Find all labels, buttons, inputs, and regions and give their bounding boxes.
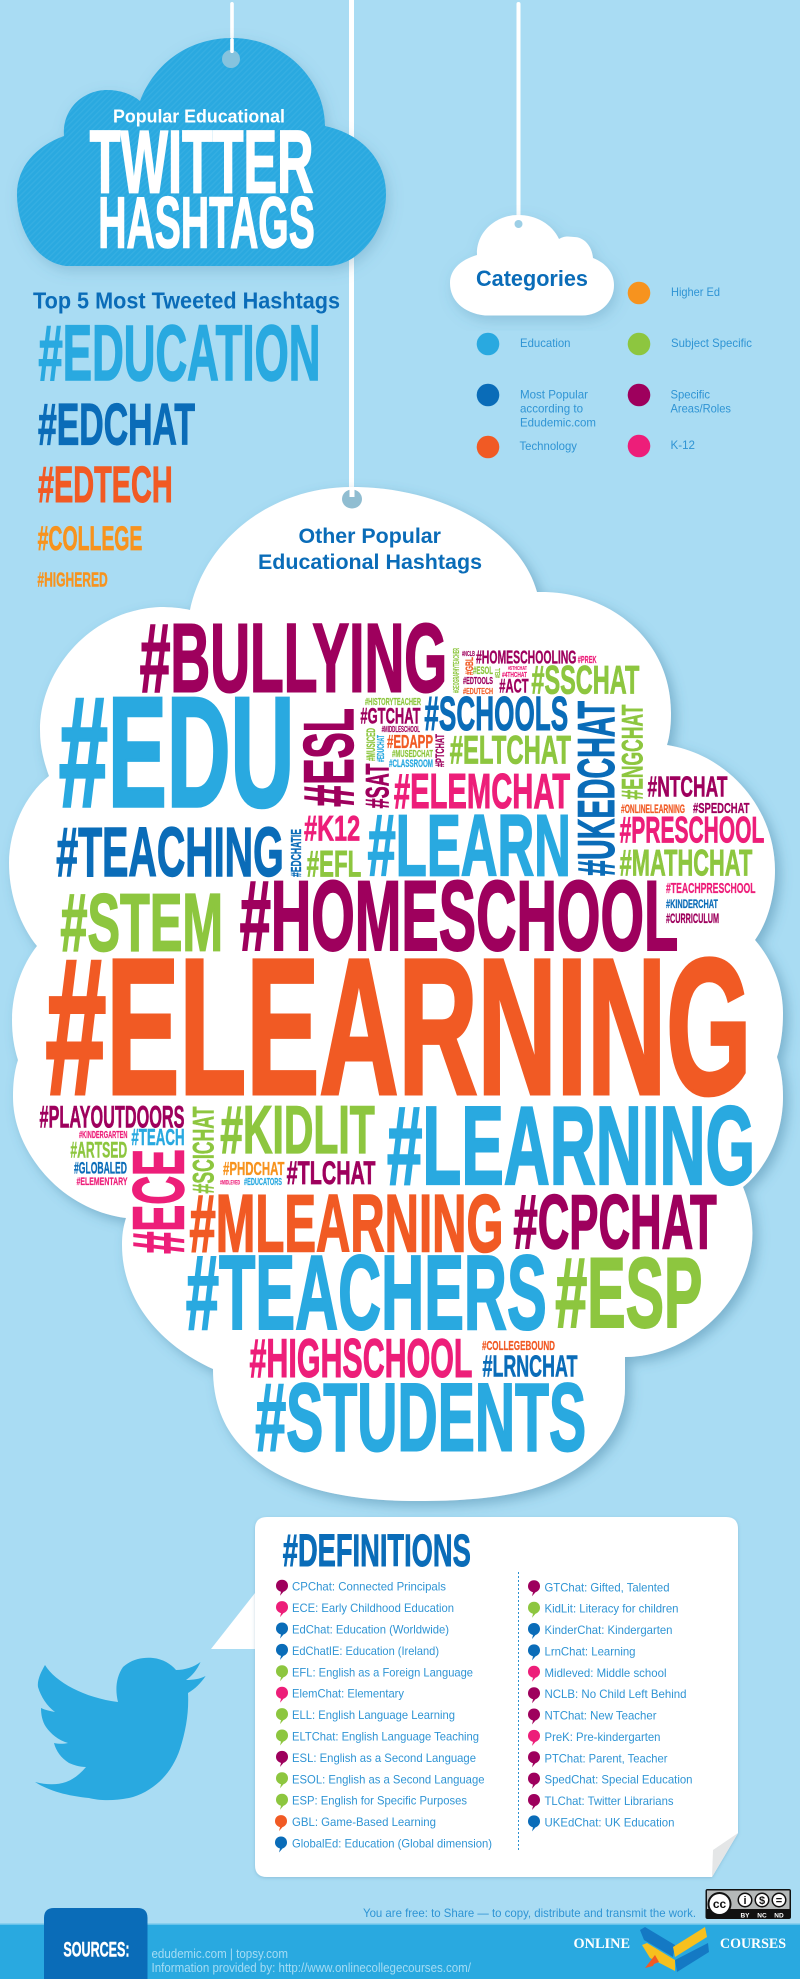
top 5 list: #COLLEGE bbox=[38, 520, 142, 558]
top 5 list: #EDTECH bbox=[38, 456, 173, 513]
right definitions: PreK: Pre-kindergarten bbox=[544, 1730, 660, 1744]
word cloud: #GBL bbox=[464, 657, 476, 675]
top 5 list bbox=[37, 309, 320, 592]
word cloud: #GLOBALED bbox=[74, 1158, 127, 1178]
word cloud: #MIDDLESCHOOL bbox=[382, 724, 420, 734]
word cloud: #ECE bbox=[119, 1149, 199, 1254]
right definitions: NTChat: New Teacher bbox=[544, 1708, 657, 1722]
word cloud: #HOMESCHOOLING bbox=[476, 648, 576, 668]
right definitions: GTChat: Gifted, Talented bbox=[544, 1580, 670, 1594]
top 5 list: #HIGHERED bbox=[37, 570, 108, 592]
left definitions: ESOL: English as a Second Language bbox=[292, 1772, 485, 1786]
left definitions: ELTChat: English Language Teaching bbox=[292, 1730, 479, 1744]
creative commons badge bbox=[706, 1889, 791, 1920]
legend: Subject Specific bbox=[671, 336, 752, 350]
icon: twitter bird bbox=[35, 1658, 206, 1800]
right definitions: KinderChat: Kindergarten bbox=[544, 1623, 672, 1637]
word cloud: #KIDLIT bbox=[220, 1093, 375, 1168]
word cloud: #MUSEDCHAT bbox=[392, 749, 433, 760]
word cloud: #EDUCATORS bbox=[244, 1177, 282, 1188]
sources box bbox=[44, 1908, 148, 1979]
word cloud: #ARTSED bbox=[70, 1138, 127, 1163]
left definitions: ELL: English Language Learning bbox=[292, 1708, 455, 1722]
word cloud: #ENGCHAT bbox=[616, 704, 650, 800]
right definitions: NCLB: No Child Left Behind bbox=[544, 1687, 686, 1701]
word cloud: #PLAYOUTDOORS bbox=[40, 1100, 185, 1134]
right definitions: UKEdChat: UK Education bbox=[544, 1815, 674, 1829]
column divider bbox=[518, 1572, 520, 1852]
top 5 list: #EDCHAT bbox=[38, 393, 195, 458]
word cloud: #EDCHATIE bbox=[288, 829, 305, 877]
page curl bbox=[712, 1833, 738, 1877]
heading: other popular hashtags: Educational Hashtags bbox=[258, 551, 482, 574]
left definitions: ECE: Early Childhood Education bbox=[292, 1601, 454, 1615]
word cloud: #LEARN bbox=[368, 796, 571, 894]
left definitions: GlobalEd: Education (Global dimension) bbox=[292, 1836, 492, 1850]
legend: Education bbox=[520, 336, 570, 350]
word cloud: #ELL bbox=[495, 668, 502, 678]
legend: Specific bbox=[670, 388, 710, 402]
legend: Edudemic.com bbox=[520, 416, 596, 430]
word cloud: #MLEARNING bbox=[189, 1180, 503, 1270]
legend bbox=[477, 282, 752, 458]
hanging string: main cloud bbox=[349, 0, 354, 497]
top 5 list: #EDUCATION bbox=[38, 309, 320, 397]
title cloud bbox=[17, 38, 386, 266]
sources text: edudemic.com | topsy.com bbox=[152, 1946, 288, 1961]
main cloud hanging hole bbox=[342, 487, 362, 508]
word cloud: #NTCHAT bbox=[648, 770, 728, 802]
word cloud: #CURRICULUM bbox=[666, 911, 719, 926]
legend: K-12 bbox=[670, 438, 695, 452]
word cloud: #SPEDCHAT bbox=[693, 800, 750, 817]
word cloud: #UKEDCHAT bbox=[568, 701, 626, 876]
word cloud: #ESOL bbox=[473, 665, 493, 677]
title cloud: HASHTAGS bbox=[98, 184, 315, 264]
speech bubble tail bbox=[211, 1593, 255, 1649]
word cloud: #BULLYING bbox=[140, 603, 447, 712]
word cloud: #TLCHAT bbox=[287, 1155, 376, 1191]
word cloud: #EDUTECH bbox=[463, 686, 493, 696]
right definitions: LrnChat: Learning bbox=[544, 1644, 636, 1658]
creative commons badge: NC bbox=[757, 1912, 767, 1920]
word cloud: #PTCHAT bbox=[433, 734, 447, 767]
creative commons badge: cc bbox=[713, 1897, 726, 1911]
word cloud: #PREK bbox=[578, 655, 596, 666]
word cloud: #SSCHAT bbox=[531, 658, 639, 702]
word cloud: #ELEMENTARY bbox=[76, 1176, 128, 1188]
word cloud: #COLLEGEBOUND bbox=[482, 1338, 555, 1353]
word cloud: #MIDLEVED bbox=[220, 1180, 240, 1186]
word cloud: #PHDCHAT bbox=[223, 1159, 285, 1179]
legend: Most Popular bbox=[520, 388, 588, 402]
legend: Areas/Roles bbox=[670, 402, 731, 416]
word cloud: #ESL bbox=[289, 708, 368, 807]
creative commons badge: i bbox=[743, 1895, 747, 1907]
word cloud: #EFL bbox=[307, 843, 361, 884]
word cloud: #EDTOOLS bbox=[463, 676, 493, 687]
sources text: Information provided by: http://www.onlinecollegecourses.com/ bbox=[152, 1960, 471, 1975]
right definitions: TLChat: Twitter Librarians bbox=[544, 1794, 674, 1808]
word cloud: #TEACHING bbox=[56, 813, 284, 891]
online courses logo: ONLINE bbox=[574, 1936, 630, 1952]
creative commons badge: BY bbox=[740, 1912, 750, 1920]
right definitions: KidLit: Literacy for children bbox=[544, 1602, 678, 1616]
word cloud: #NCLB bbox=[462, 651, 475, 658]
word cloud: #STEM bbox=[60, 878, 223, 968]
word cloud: #HIGHSCHOOL bbox=[250, 1328, 472, 1389]
legend: Higher Ed bbox=[671, 285, 720, 299]
footer band bbox=[0, 1924, 800, 1979]
word cloud: #EDUCHAT bbox=[376, 735, 387, 762]
left definitions: CPChat: Connected Principals bbox=[292, 1580, 446, 1594]
left definitions: GBL: Game-Based Learning bbox=[292, 1815, 436, 1829]
left definitions bbox=[275, 1580, 492, 1852]
left definitions: ESL: English as a Second Language bbox=[292, 1751, 476, 1765]
left definitions: EdChat: Education (Worldwide) bbox=[292, 1622, 449, 1636]
left definitions: ElemChat: Elementary bbox=[292, 1687, 404, 1701]
definitions panel bbox=[211, 1517, 738, 1877]
word cloud: #ELEMCHAT bbox=[394, 764, 570, 819]
online courses logo: COURSES bbox=[720, 1936, 786, 1952]
heading: other popular hashtags bbox=[258, 525, 482, 574]
legend: according to bbox=[520, 402, 583, 416]
hanging string: title cloud bbox=[230, 2, 234, 54]
panel sheet bbox=[255, 1517, 738, 1877]
word cloud: #HISTORYTEACHER bbox=[365, 697, 421, 708]
right definitions: Midleved: Middle school bbox=[544, 1666, 666, 1680]
heading: other popular hashtags: Other Popular bbox=[298, 525, 441, 548]
word cloud: #ACT bbox=[499, 676, 529, 698]
categories cloud bbox=[450, 215, 614, 316]
title cloud: TWITTER bbox=[90, 112, 314, 211]
word cloud: #MUSICED bbox=[364, 728, 378, 761]
word cloud: #LRNCHAT bbox=[482, 1350, 578, 1384]
heading: top 5: Top 5 Most Tweeted Hashtags bbox=[33, 288, 340, 314]
word cloud: #EDU bbox=[59, 665, 294, 840]
left definitions: ESP: English for Specific Purposes bbox=[292, 1794, 467, 1808]
right definitions bbox=[528, 1580, 692, 1831]
main cloud bbox=[9, 487, 783, 1501]
word cloud: #4THCHAT bbox=[502, 672, 527, 679]
creative commons badge: $ bbox=[759, 1895, 765, 1907]
sources text bbox=[152, 1946, 471, 1975]
hanging string: categories cloud bbox=[516, 2, 520, 222]
legend: Technology bbox=[520, 439, 577, 453]
categories cloud: Categories bbox=[476, 266, 588, 291]
sources box: SOURCES: bbox=[63, 1937, 130, 1962]
online courses logo bbox=[574, 1927, 786, 1972]
word cloud bbox=[40, 603, 764, 1471]
word cloud: #SCICHAT bbox=[188, 1106, 220, 1194]
word cloud: #ONLINELEARNING bbox=[621, 802, 685, 816]
left definitions: EFL: English as a Foreign Language bbox=[292, 1665, 473, 1679]
word cloud: #KINDERCHAT bbox=[666, 897, 718, 911]
heading: definitions: #DEFINITIONS bbox=[283, 1525, 471, 1576]
right definitions: PTChat: Parent, Teacher bbox=[544, 1751, 668, 1765]
word cloud: #SAT bbox=[359, 764, 395, 808]
word cloud: #CLASSROOM bbox=[389, 758, 433, 770]
title cloud: Popular Educational bbox=[113, 106, 285, 126]
word cloud: #5THCHAT bbox=[508, 666, 527, 672]
word cloud: #K12 bbox=[304, 808, 360, 848]
word cloud: #GTCHAT bbox=[360, 704, 421, 729]
word cloud: #GEOGRAPHYTEACHER bbox=[451, 648, 461, 693]
word cloud: #EDAPP bbox=[387, 732, 433, 752]
word cloud: #TEACH bbox=[131, 1124, 185, 1150]
license note: You are free: to Share — to copy, distribute and transmit the work. bbox=[363, 1906, 696, 1920]
creative commons badge: ND bbox=[774, 1912, 784, 1920]
left definitions: EdChatIE: Education (Ireland) bbox=[292, 1644, 439, 1658]
word cloud: #SCHOOLS bbox=[424, 688, 568, 741]
right definitions: SpedChat: Special Education bbox=[544, 1773, 692, 1787]
word cloud: #ELTCHAT bbox=[450, 728, 571, 772]
creative commons badge: = bbox=[776, 1895, 782, 1907]
word cloud: #KINDERGARTEN bbox=[79, 1130, 128, 1141]
